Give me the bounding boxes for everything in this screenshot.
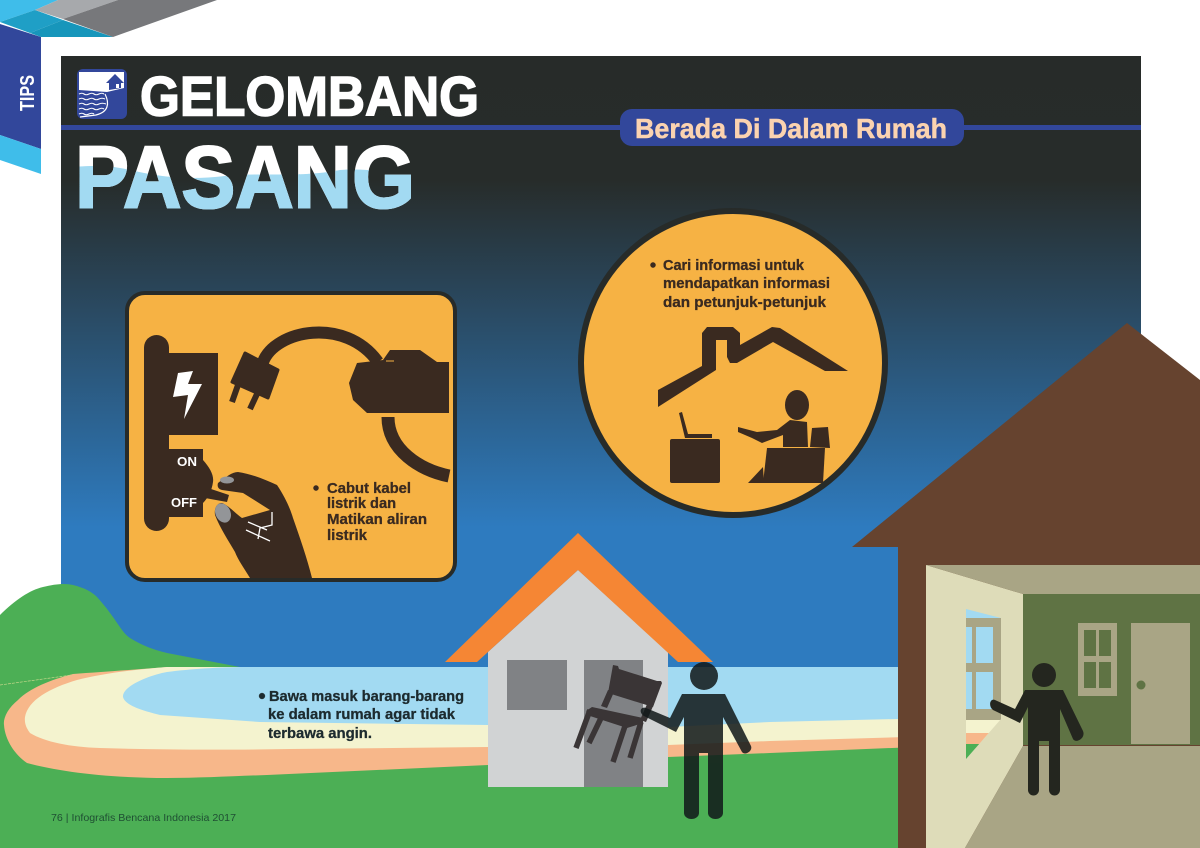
text: cabut kabel: listrik xyxy=(327,528,368,544)
footer page number: 76 | Infografis Bencana Indonesia 2017 xyxy=(51,812,236,824)
background panel: night sky xyxy=(61,56,1141,676)
side tab: TIPS xyxy=(0,24,41,174)
side tab: TIPS: TIPS xyxy=(17,75,39,111)
icon: roof xyxy=(658,327,848,407)
icon: desk with laptop xyxy=(670,412,720,483)
person carrying chair xyxy=(641,662,751,819)
panel: electricity card xyxy=(127,293,455,580)
text: cabut kabel: Cabut kabel xyxy=(327,481,411,497)
text: bawa masuk barang: Bawa masuk barang-barang xyxy=(269,688,464,705)
text: cari informasi xyxy=(650,258,830,311)
title: PASANG xyxy=(80,145,411,210)
icon: lightning bolt xyxy=(173,371,202,419)
text: cabut kabel: Matikan aliran xyxy=(327,512,427,528)
label: OFF: OFF xyxy=(171,496,197,510)
icon: plug and cord xyxy=(232,333,378,409)
text: bawa masuk barang xyxy=(259,688,464,742)
header rule xyxy=(61,125,1141,130)
door xyxy=(1131,623,1190,744)
small house xyxy=(445,533,713,787)
text: cabut kabel: listrik dan xyxy=(327,496,396,512)
title: GELOMBANG: GELOMBANG xyxy=(140,64,479,128)
switch plate xyxy=(144,335,218,531)
text: cabut kabel xyxy=(313,481,427,544)
icon: person in armchair xyxy=(738,390,830,483)
icon: chair being carried xyxy=(576,665,662,762)
big house xyxy=(852,323,1200,848)
sea and beach xyxy=(0,667,940,778)
side window xyxy=(966,605,1002,760)
top corner decoration xyxy=(0,0,217,37)
text: bawa masuk barang: ke dalam rumah agar tidak xyxy=(268,706,456,723)
title: PASANG: PASANG xyxy=(75,128,415,226)
panel: information circle xyxy=(581,211,885,515)
icon: fist holding cable xyxy=(349,350,449,476)
icon: hand on switch xyxy=(205,472,312,578)
person inside house xyxy=(990,663,1084,796)
text: cari informasi: dan petunjuk-petunjuk xyxy=(663,295,827,311)
text: cari informasi: Cari informasi untuk xyxy=(663,258,805,274)
subtitle pill: Berada Di Dalam Rumah xyxy=(635,113,947,144)
green hill xyxy=(0,584,245,668)
label: ON: ON xyxy=(177,455,197,469)
text: bawa masuk barang: terbawa angin. xyxy=(268,725,372,742)
icon: tidal wave badge xyxy=(77,69,127,119)
text: cari informasi: mendapatkan informasi xyxy=(663,276,830,292)
title: PASANG: PASANG xyxy=(75,128,415,226)
back window xyxy=(1078,623,1117,696)
ground xyxy=(0,667,1200,848)
